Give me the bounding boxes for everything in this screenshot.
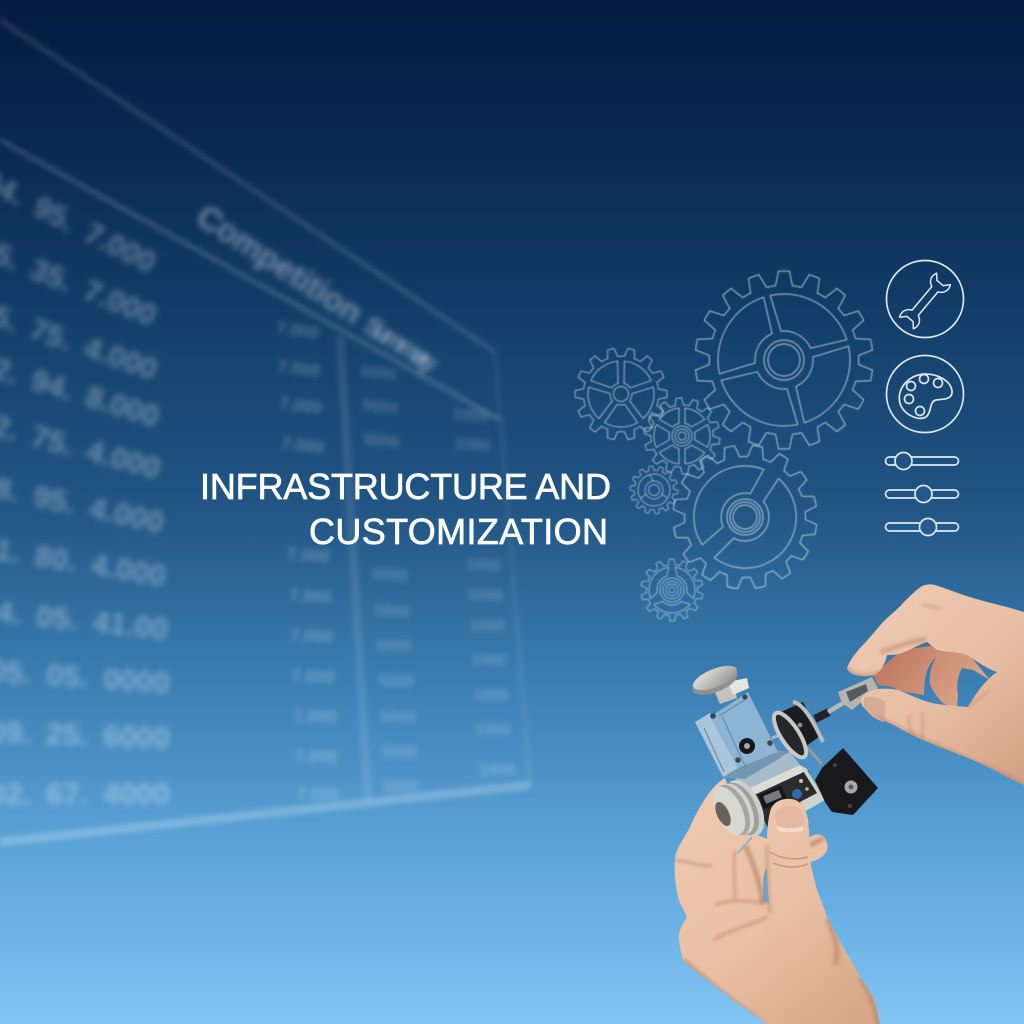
blurred right number columns: 5000 (372, 566, 409, 585)
blurred right number columns: 1000 (475, 722, 511, 739)
device: blue housing (695, 692, 782, 779)
icon: palette (886, 356, 964, 432)
blurred right number columns: 1000 (473, 687, 509, 704)
blurred middle number column: 7.000 (294, 707, 337, 726)
blurred middle number column: 7.000 (286, 545, 330, 566)
blurred table heading (190, 197, 445, 379)
blurred right number columns: 5000 (383, 779, 419, 796)
blurred table heading: Summary (359, 310, 445, 379)
blurred right number columns: 1000 (469, 617, 505, 636)
title (200, 466, 611, 552)
hand shading (675, 838, 878, 1024)
back fingers (873, 645, 990, 707)
blurred right number columns: 5000 (360, 363, 397, 384)
gear: large bottom (662, 434, 828, 600)
device: gear discs and shaft (768, 702, 845, 764)
blurred right number columns: 5000 (363, 431, 400, 452)
blurred right number columns: 1000 (452, 405, 489, 426)
thumb nail (864, 697, 885, 722)
hand front silhouette (847, 584, 1024, 785)
finger shading (847, 605, 1024, 785)
customization icons (886, 260, 964, 536)
blurred right number columns: 1000 (465, 556, 502, 575)
blurred middle number column: 7.000 (289, 586, 332, 607)
blurred right number columns: 1000 (467, 586, 504, 605)
gear: tiny (628, 464, 680, 516)
device: top knob (689, 661, 749, 704)
blurred right number columns: 5000 (381, 744, 417, 761)
blurred right number columns: 1000 (471, 651, 507, 670)
blurred right number columns: 5000 (362, 397, 399, 418)
gear cluster (575, 256, 887, 627)
blurred middle number column: 7.000 (297, 785, 339, 804)
upper hand adjusting head (847, 584, 1024, 785)
gear: small centre (639, 392, 725, 480)
title: INFRASTRUCTURE AND (200, 466, 611, 507)
blurred data table in background (0, 20, 530, 842)
blurred middle number column: 7.000 (275, 318, 320, 343)
blurred right number columns: 1000 (454, 435, 491, 456)
icon: wrench (886, 260, 964, 338)
blurred middle number column: 7.000 (276, 356, 321, 381)
gear: small left (575, 347, 667, 441)
blurred middle number column: 7.000 (295, 747, 338, 766)
lower hand thumb (767, 799, 827, 960)
blurred middle number column: 7.000 (292, 666, 335, 687)
blurred table heading: Competition (190, 197, 370, 331)
icon: sliders (886, 452, 958, 536)
blurred middle number column: 7.000 (280, 434, 325, 458)
table frame lines (0, 20, 530, 842)
blurred left number column (0, 164, 171, 811)
blurred right number columns (360, 363, 515, 796)
blue gap between fingers (738, 837, 752, 853)
blurred middle number column: 7.000 (290, 626, 333, 647)
blurred middle number column: 7.000 (278, 394, 323, 418)
mechanical device (689, 661, 878, 842)
blurred right number columns: 1000 (479, 762, 515, 779)
blurred right number columns: 5000 (380, 709, 416, 726)
blurred right number columns: 5000 (378, 672, 414, 691)
device: adjustment head (838, 677, 878, 710)
device: black cube (815, 748, 878, 815)
device: bottom body (735, 750, 825, 828)
lower hand holding device (675, 778, 880, 1024)
device: silver pulley (706, 774, 772, 842)
blurred right number columns: 5000 (376, 637, 412, 656)
gear: bottom small (635, 553, 709, 627)
blurred right number columns: 5000 (374, 602, 411, 621)
gear: large top (681, 256, 887, 464)
title: CUSTOMIZATION (309, 511, 608, 552)
blurred middle number column (275, 318, 339, 804)
